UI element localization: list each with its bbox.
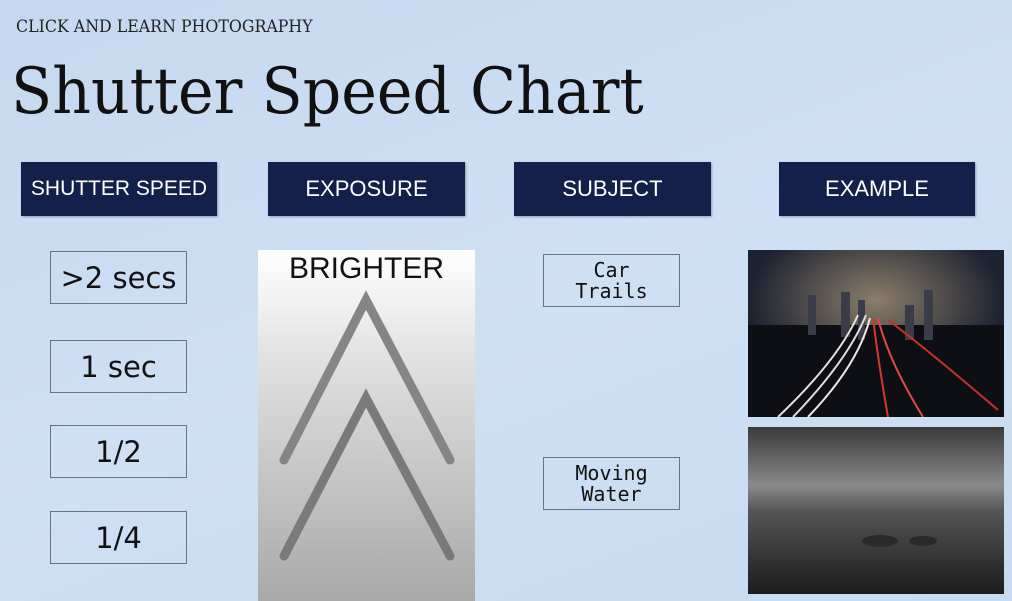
speed: >2 secs: >2 secs [60,260,176,294]
photo: car trails [748,250,1004,417]
subject: moving water [543,457,680,510]
speed: 1/4 [50,511,187,564]
speed: 1/4: 1/4 [95,520,142,554]
photo: moving water [748,427,1004,594]
subject: car trails: Trails [575,278,648,302]
speed: 1/2: 1/2 [95,434,142,468]
title: Shutter Speed Chart [11,55,644,129]
exposure panel [258,250,475,601]
header: exposure: EXPOSURE [305,176,428,201]
speed: 1 sec [50,340,187,393]
label: brighter: BRIGHTER [289,252,444,285]
header: example: EXAMPLE [825,176,929,201]
subtitle: CLICK AND LEARN PHOTOGRAPHY [16,17,313,37]
subject: moving water: Water [581,482,642,506]
speed: >2 secs [50,251,187,304]
header: example [779,162,975,216]
header: subject [514,162,711,216]
header: exposure [268,162,465,216]
header: shutter speed: SHUTTER SPEED [31,177,207,200]
header: shutter speed [21,162,217,216]
speed: 1/2 [50,425,187,478]
subject: car trails [543,254,680,307]
speed: 1 sec: 1 sec [80,350,157,384]
icon: chevron arrows [280,290,454,560]
subject: car trails: Car [593,258,630,282]
header: subject: SUBJECT [562,176,663,201]
subject: moving water: Moving [575,460,648,484]
